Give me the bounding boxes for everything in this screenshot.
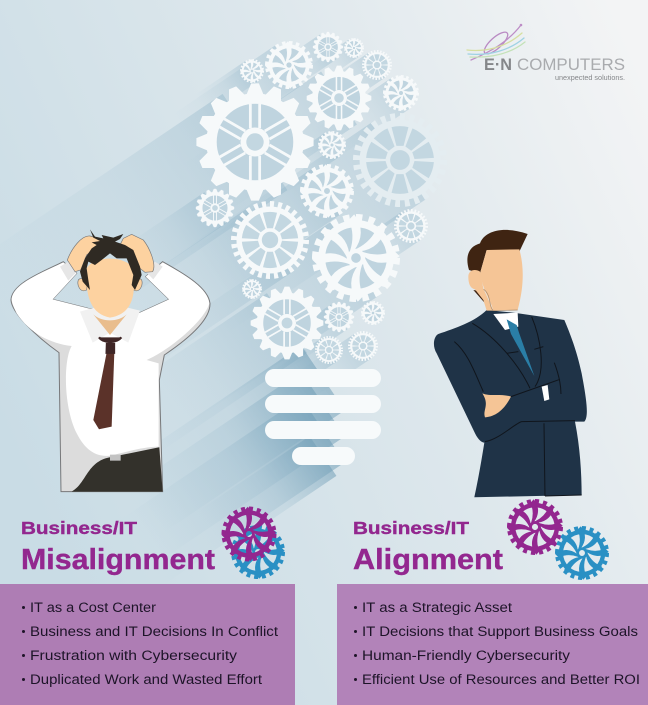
panel: misalignment list: Duplicated Work and Wasted Effort — [30, 672, 262, 687]
tie — [507, 319, 534, 376]
hair — [80, 229, 142, 290]
logo: E-N Computers: E·N — [484, 55, 512, 74]
belt buckle — [110, 455, 121, 461]
head and hands — [67, 229, 154, 335]
heading: Business/IT Alignment — [353, 518, 503, 576]
suit seams — [454, 317, 582, 496]
panel: alignment list: Efficient Use of Resources and Better ROI — [362, 672, 640, 687]
face — [86, 259, 134, 318]
collar — [80, 303, 140, 343]
shirt highlights — [12, 262, 209, 456]
trousers — [72, 447, 163, 492]
panel: misalignment list: IT as a Cost Center — [30, 600, 157, 615]
light bulb base bars — [265, 369, 381, 465]
face — [480, 249, 523, 311]
logo: E-N Computers: unexpected solutions. — [555, 75, 625, 82]
heading: Business/IT Misalignment: Business/IT — [21, 518, 137, 538]
hands — [67, 234, 154, 272]
jaw line — [484, 289, 518, 311]
panel: misalignment list — [0, 584, 295, 705]
neck — [93, 314, 127, 335]
icon: separated gears — [508, 500, 608, 579]
shirt cuffs — [60, 262, 163, 281]
shirt — [493, 313, 518, 330]
heading: Business/IT Misalignment: Misalignment — [21, 544, 215, 576]
shirt base — [11, 262, 210, 492]
figure: confident businessman — [434, 230, 587, 497]
neck and ear — [468, 270, 493, 311]
heading: Business/IT Alignment: Alignment — [353, 544, 503, 576]
heading: Business/IT Misalignment — [21, 518, 215, 576]
panel: alignment list — [337, 584, 648, 705]
ears — [78, 279, 142, 291]
panel: alignment list: IT as a Strategic Asset — [362, 600, 512, 615]
long shadows of the light bulb — [0, 35, 426, 584]
tie — [93, 353, 114, 429]
panel: alignment list: IT Decisions that Support Business Goals — [362, 624, 638, 639]
hair — [467, 230, 528, 304]
logo: E-N Computers — [467, 24, 625, 82]
panel: misalignment list: Frustration with Cybersecurity — [30, 648, 237, 663]
panel: alignment list: Human-Friendly Cybersecurity — [362, 648, 570, 663]
icon: overlapping gears — [222, 507, 284, 578]
suit — [434, 310, 587, 497]
tie knot — [99, 337, 121, 353]
figure: stressed businessman — [11, 229, 210, 492]
logo: E-N Computers: COMPUTERS — [517, 55, 625, 74]
gears forming the light bulb — [196, 32, 443, 363]
hand — [482, 393, 511, 417]
panel: misalignment list: Business and IT Decisions In Conflict — [30, 624, 278, 639]
heading: Business/IT Alignment: Business/IT — [353, 518, 469, 538]
shirt cuff — [542, 385, 549, 401]
